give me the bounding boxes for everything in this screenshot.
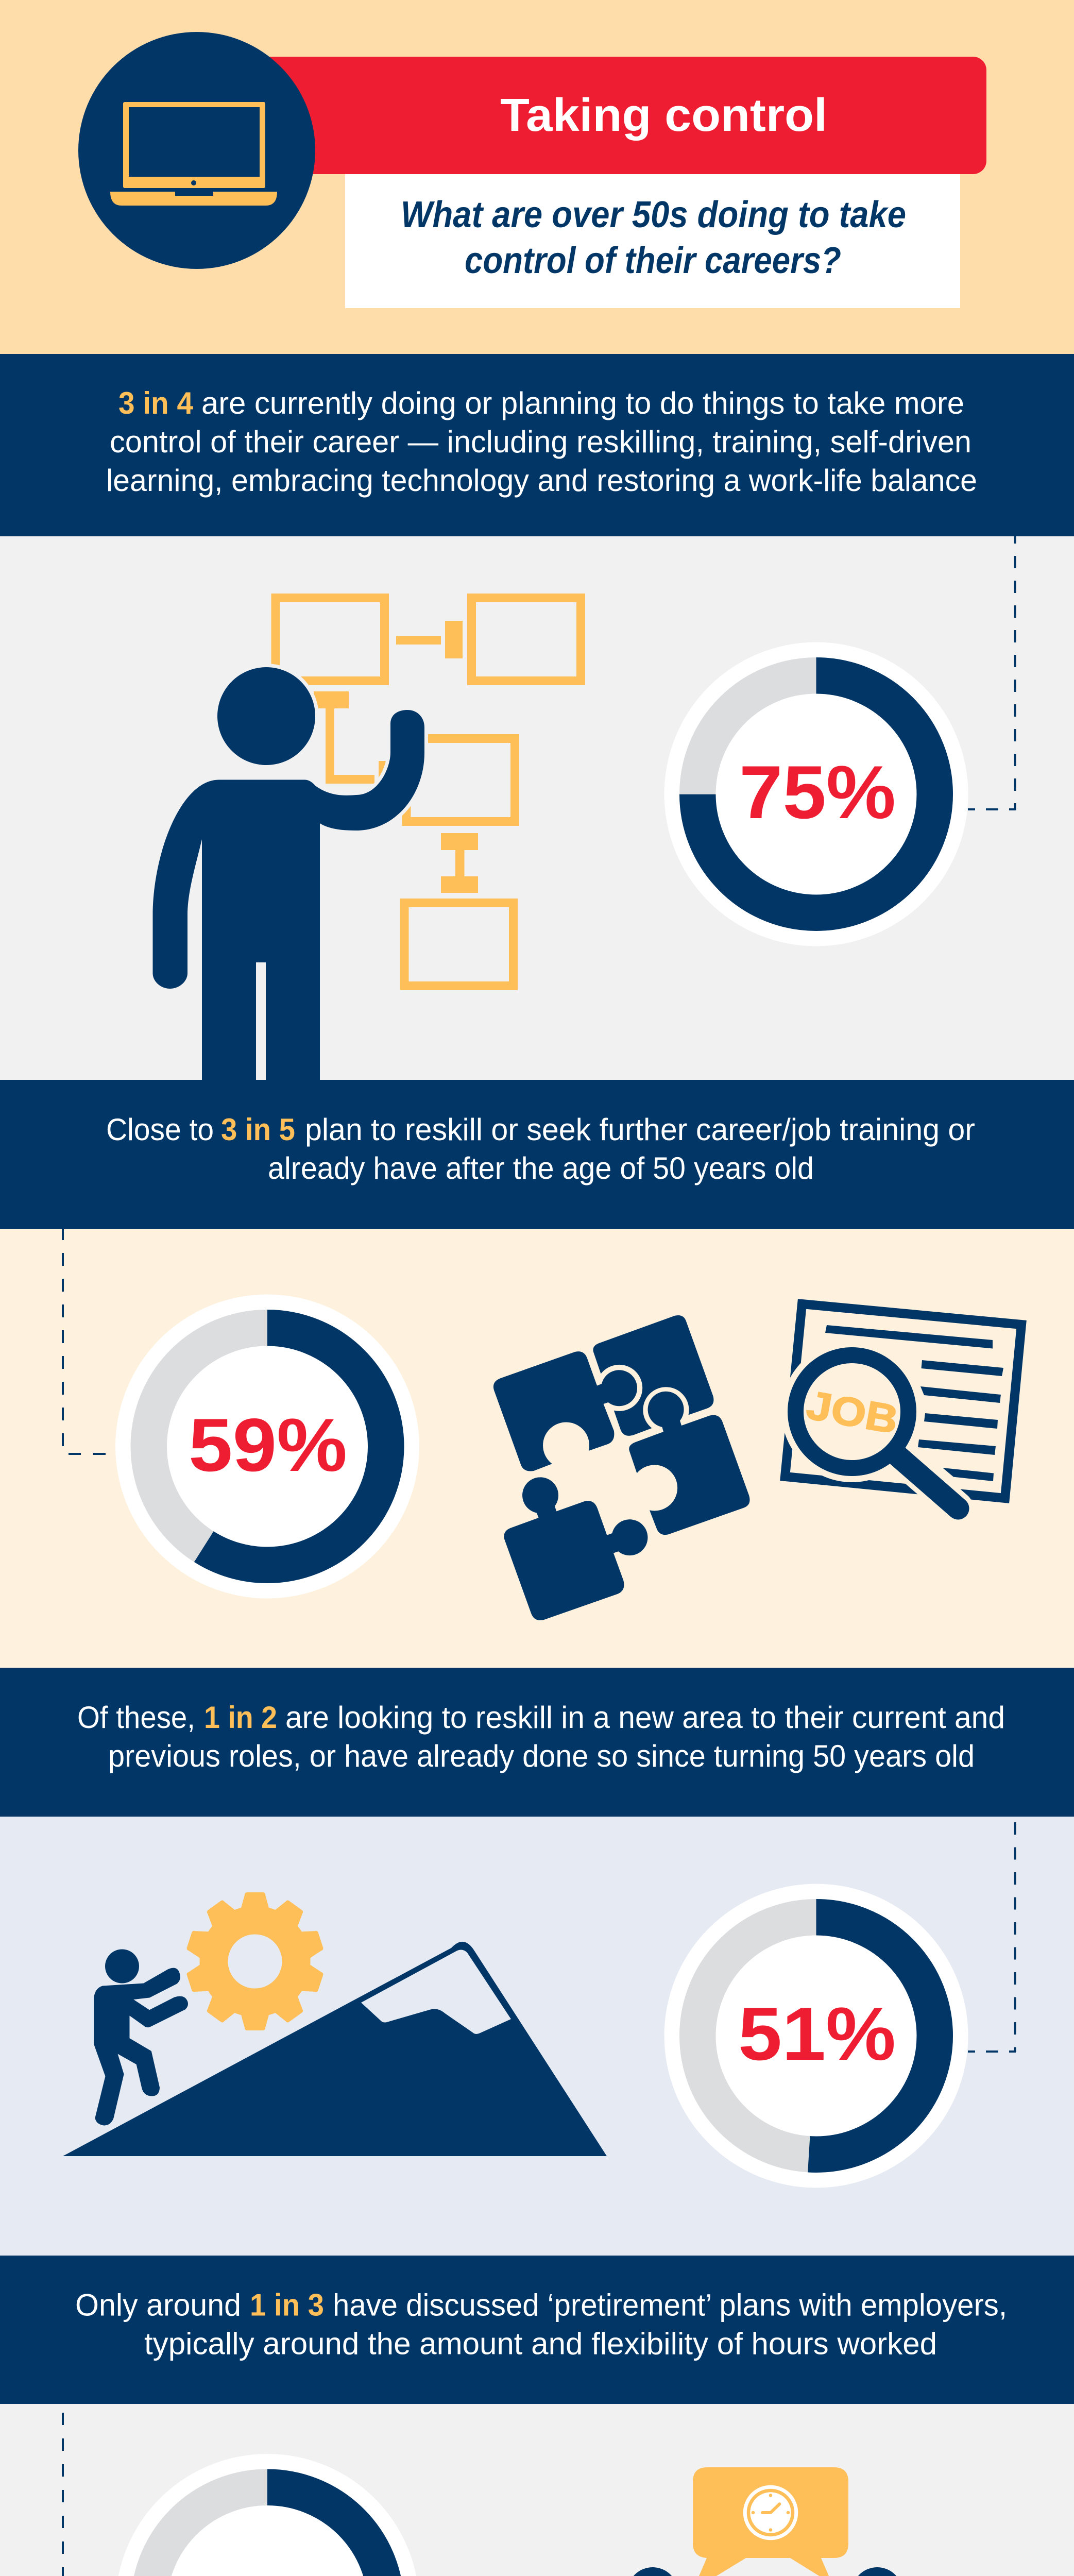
statement band: 1 in 2: previous roles, or have already done so since turning 50 years old	[108, 1739, 975, 1773]
statement band: 1 in 3: 1 in 3	[250, 2287, 324, 2323]
donut chart: 51%	[664, 1884, 968, 2188]
donut chart: 36%	[115, 2454, 419, 2576]
statement band: 3 in 4: are currently doing or planning to do things to take more	[201, 386, 964, 420]
statement band: 3 in 5: Close to	[106, 1112, 214, 1147]
icon: job magnifier: JOB	[804, 1382, 901, 1443]
header panel	[0, 0, 1074, 355]
statement band: 1 in 2	[0, 1668, 1074, 1817]
statement band: 1 in 3: have discussed ‘pretirement’ plans with employers,	[333, 2287, 1007, 2323]
icon: mountain	[63, 1942, 607, 2156]
icon: speech bubble with clock	[693, 2467, 848, 2576]
panel: 36 percent	[0, 2404, 1074, 2576]
icon: climbing person	[95, 1950, 187, 2125]
statement band: 3 in 4: 3 in 4	[118, 386, 194, 420]
connector: dashed line	[63, 2413, 106, 2576]
icon: gear	[185, 1892, 325, 2030]
statement band: 3 in 5: 3 in 5	[221, 1112, 295, 1147]
subtitle box: What are over 50s doing to take	[401, 194, 906, 235]
statement band: 3 in 5: already have after the age of 50 years old	[268, 1151, 814, 1185]
panel: 51 percent	[0, 1817, 1074, 2256]
panel: 59 percent	[0, 1229, 1074, 1668]
icon: standing person	[152, 667, 424, 1080]
statement band: 3 in 5: plan to reskill or seek further career/job training or	[305, 1112, 975, 1147]
icon: two people at a table	[600, 2567, 931, 2576]
donut chart: 75%: 75%	[739, 750, 896, 834]
statement band: 3 in 4	[0, 354, 1074, 536]
panel: 75 percent	[0, 536, 1074, 1082]
donut chart: 51%: 51%	[738, 1992, 896, 2076]
connector: dashed line	[968, 536, 1016, 810]
statement band: 1 in 2: 1 in 2	[204, 1700, 277, 1735]
icon: flow chart boxes	[276, 598, 581, 986]
icon: puzzle pieces	[493, 1315, 750, 1620]
statement band: 1 in 2: are looking to reskill in a new area to their current and	[285, 1700, 1005, 1735]
connector: dashed line	[968, 1822, 1016, 2052]
statement band: 1 in 2: Of these,	[77, 1700, 195, 1735]
title banner	[206, 57, 986, 174]
donut chart: 59%: 59%	[189, 1403, 347, 1487]
subtitle box	[345, 174, 960, 308]
donut chart: 59%	[115, 1294, 419, 1598]
statement band: 3 in 4: control of their career — including reskilling, training, self-driven	[110, 425, 971, 459]
donut chart: 75%	[664, 642, 968, 946]
statement band: 3 in 4: learning, embracing technology and restoring a work-life balance	[106, 463, 977, 498]
statement band: 1 in 3	[0, 2256, 1074, 2404]
icon: laptop	[78, 32, 315, 269]
title: Taking control	[500, 90, 827, 141]
statement band: 3 in 5	[0, 1080, 1074, 1229]
connector: dashed line	[63, 1229, 106, 1454]
statement band: 1 in 3: typically around the amount and flexibility of hours worked	[144, 2327, 937, 2361]
icon: job magnifier	[781, 1304, 1021, 1509]
statement band: 1 in 3: Only around	[75, 2287, 241, 2323]
subtitle box: control of their careers?	[465, 240, 841, 281]
